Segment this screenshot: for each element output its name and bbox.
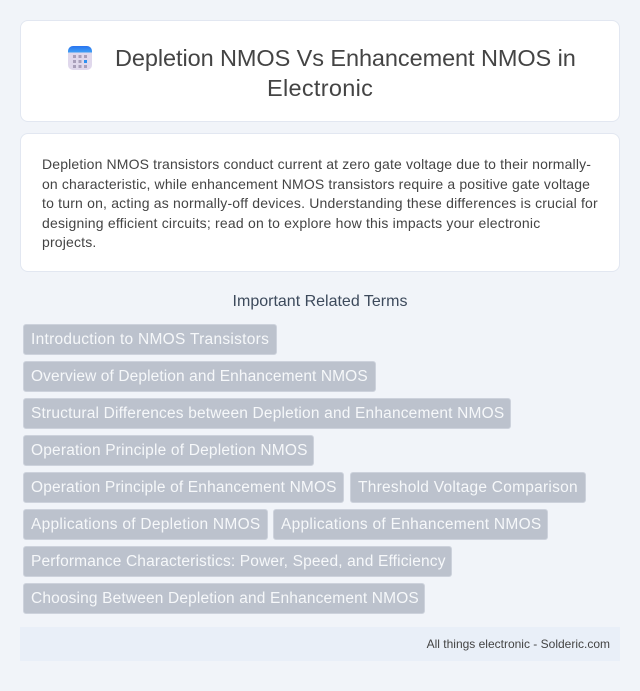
icon: calendar: [68, 46, 92, 70]
tag: Operation Principle of Depletion NMOS: [31, 442, 308, 459]
tag: Introduction to NMOS Transistors: [31, 331, 269, 348]
description text: Depletion NMOS transistors conduct current at zero gate voltage due to their normally-: [42, 156, 591, 172]
tag: Applications of Depletion NMOS: [31, 516, 261, 533]
tag: Performance Characteristics: Power, Speed, and Efficiency: [31, 553, 446, 570]
tag: [350, 472, 586, 503]
description text: on characteristic, while enhancement NMOS transistors require a positive gate voltage: [42, 176, 590, 192]
tag: [23, 509, 268, 540]
heading: important related terms: Important Related Terms: [233, 293, 407, 310]
tag: [23, 324, 277, 355]
tag list: [23, 324, 586, 614]
title: Electronic: [267, 75, 373, 101]
tag: [23, 398, 511, 429]
tag: [23, 435, 314, 466]
description text: projects.: [42, 234, 96, 250]
tag: [23, 361, 376, 392]
description text: [42, 156, 598, 250]
tag: [23, 546, 452, 577]
footer: [20, 627, 620, 661]
title: [115, 45, 576, 101]
tag: Applications of Enhancement NMOS: [281, 516, 542, 533]
title: Depletion NMOS Vs Enhancement NMOS in: [115, 45, 576, 71]
tag: Structural Differences between Depletion and Enhancement NMOS: [31, 405, 504, 422]
description text: designing efficient circuits; read on to explore how this impacts your electronic: [42, 215, 540, 231]
panel: description: [20, 133, 620, 272]
tag: Overview of Depletion and Enhancement NMOS: [31, 368, 368, 385]
tag: [273, 509, 548, 540]
tag: [23, 472, 344, 503]
tag: Operation Principle of Enhancement NMOS: [31, 479, 337, 496]
tag: Threshold Voltage Comparison: [358, 479, 578, 496]
panel: title card: [20, 20, 620, 122]
tag: Choosing Between Depletion and Enhancement NMOS: [31, 590, 419, 607]
footer: All things electronic - Solderic.com: [427, 637, 610, 651]
description text: to turn on, acting as normally-off devices. Understanding these differences is crucial for: [42, 195, 598, 211]
tag: [23, 583, 425, 614]
